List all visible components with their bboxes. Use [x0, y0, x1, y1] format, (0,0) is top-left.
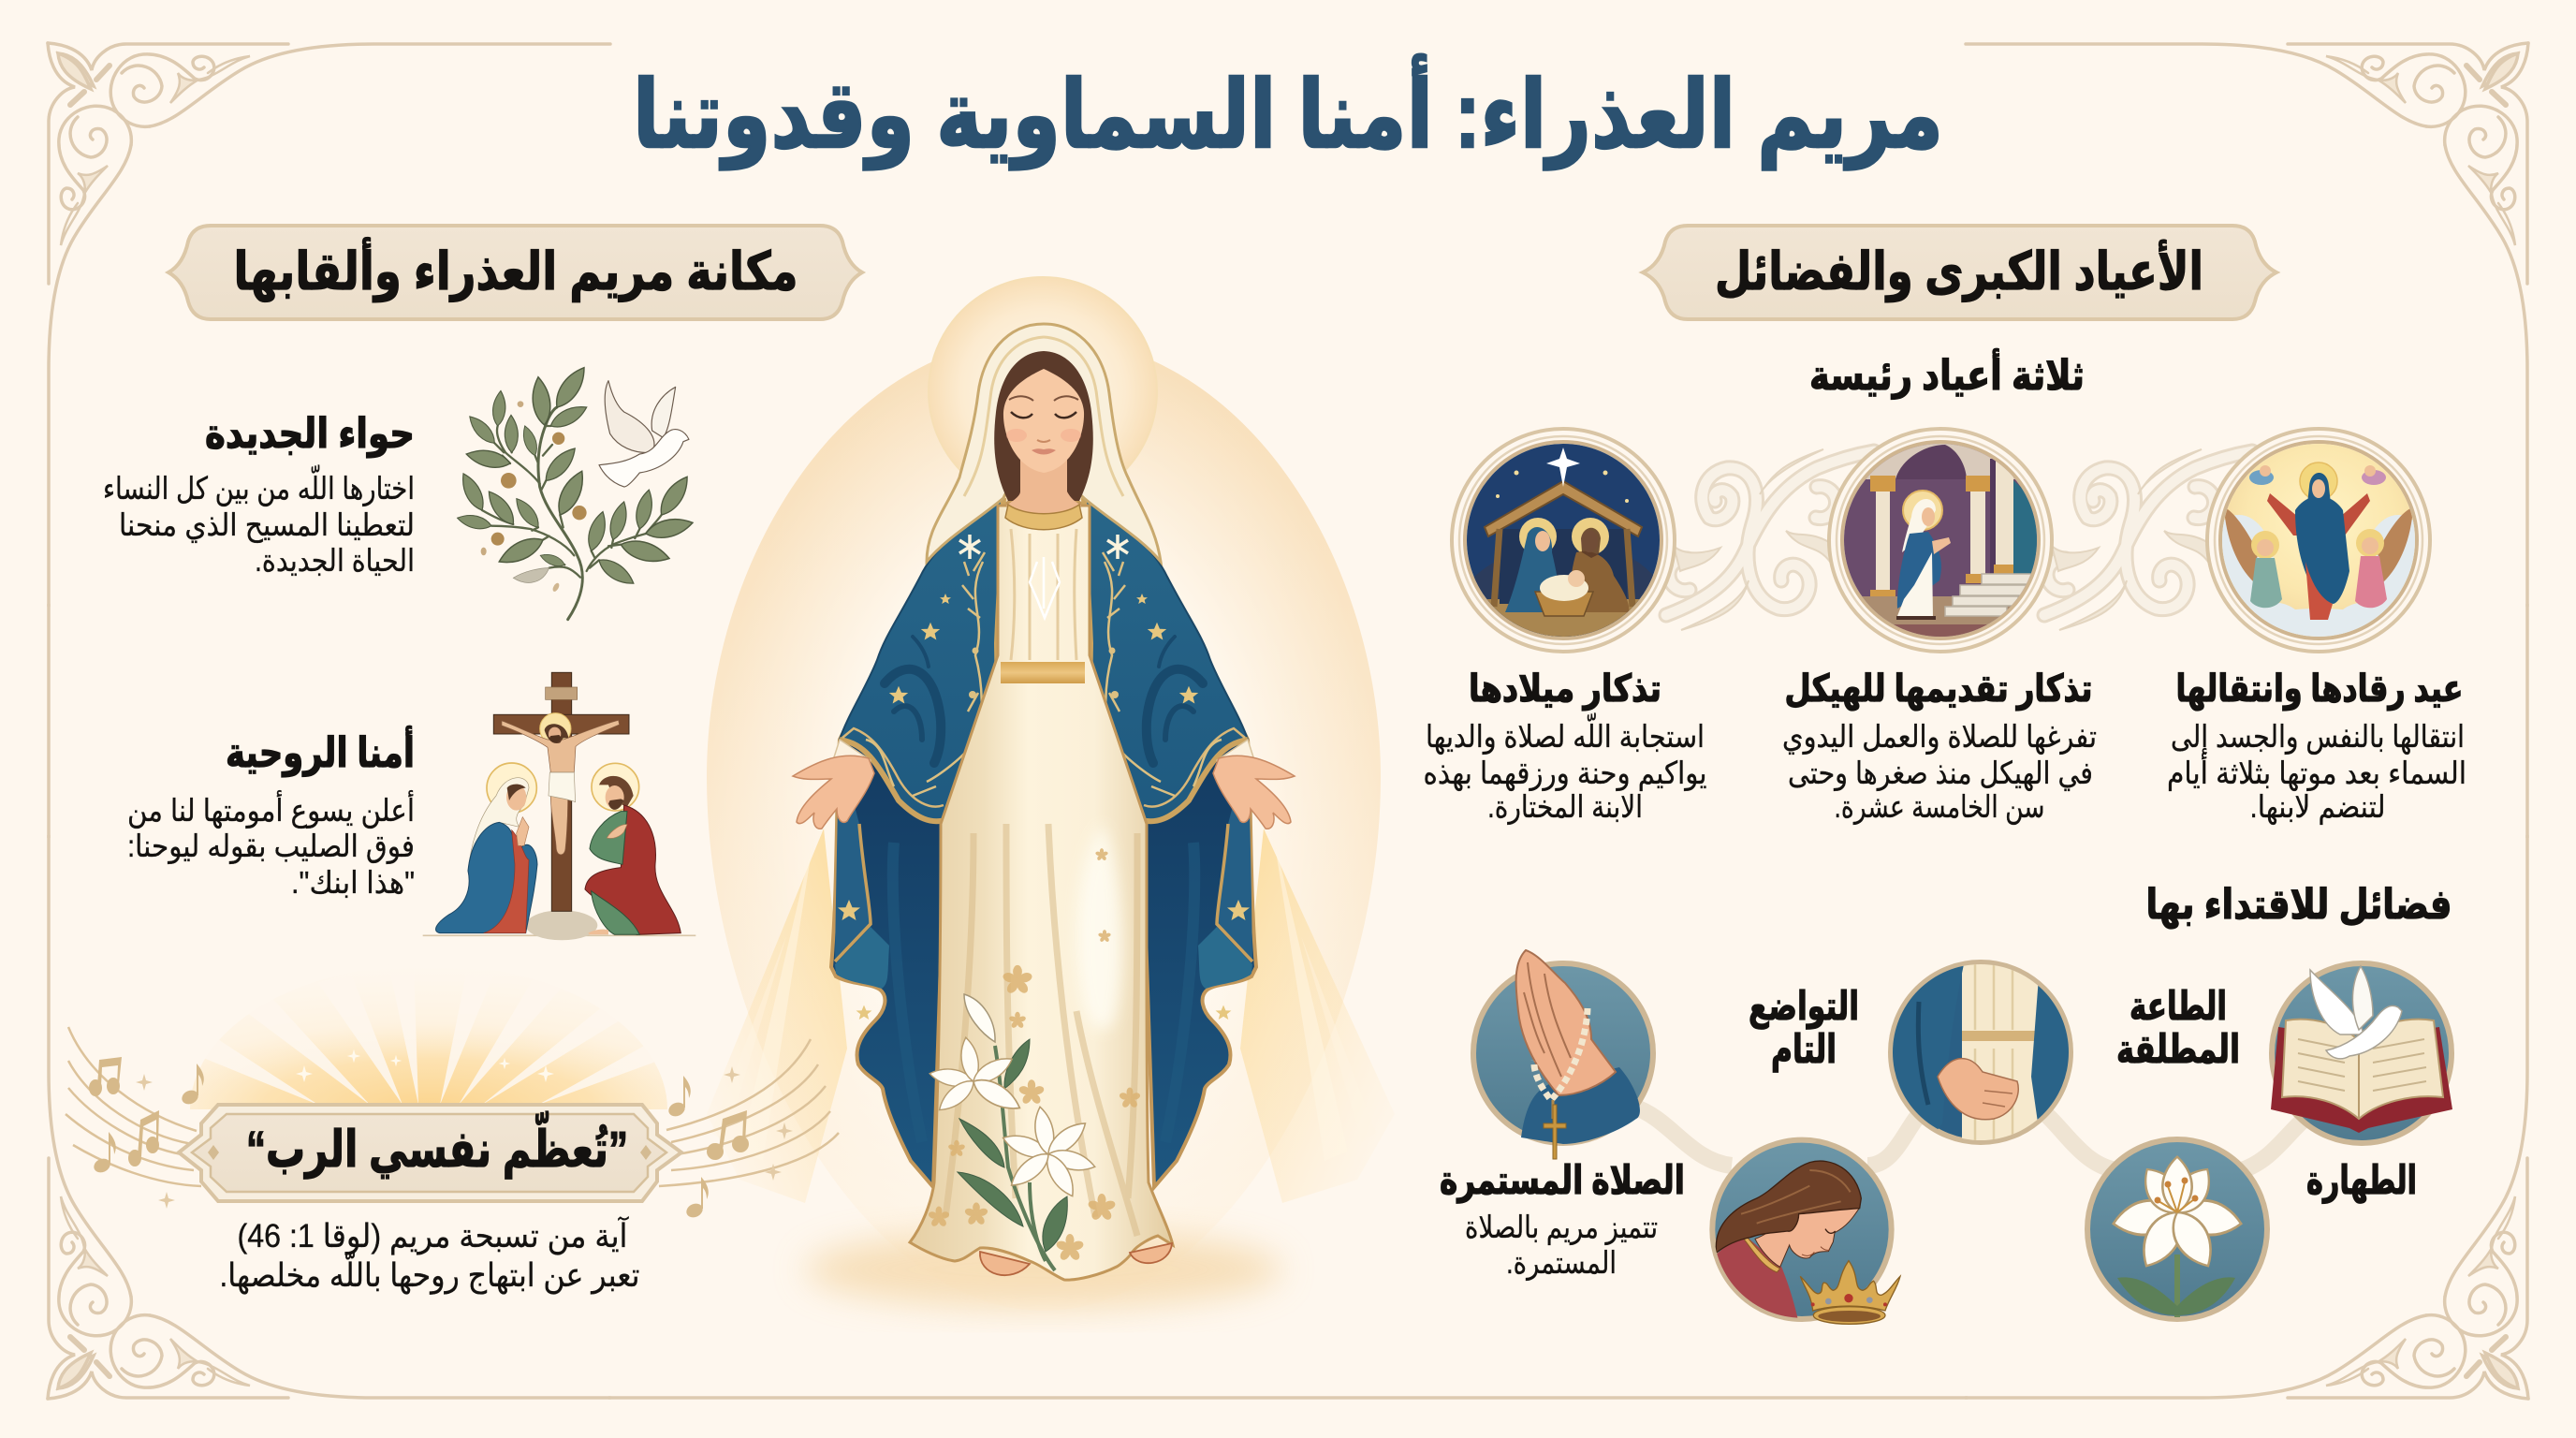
gold belt — [1001, 662, 1085, 683]
icon: olive branch and dove — [456, 363, 695, 620]
virtue label: obedience: الطاعة — [2130, 984, 2227, 1028]
hair — [994, 351, 1093, 501]
musical staff and notes — [66, 1027, 839, 1220]
verse caption — [219, 1215, 640, 1295]
hands — [793, 756, 1295, 829]
virtue label: continuous prayer: المستمرة. — [1506, 1245, 1617, 1281]
angels — [2224, 465, 2413, 608]
virtue label: continuous prayer — [1440, 1158, 1685, 1281]
feast: dormition and assumption: لتنضم لابنها. — [2250, 789, 2385, 825]
virtue: obedience medallion with book and dove — [2271, 963, 2452, 1143]
feast: nativity of Mary: الابنة المختارة. — [1487, 789, 1643, 825]
mantle — [831, 498, 1256, 1187]
feet — [980, 1243, 1172, 1275]
feast: presentation to the temple: سن الخامسة عشرة. — [1835, 789, 2044, 825]
ground shadow — [805, 1230, 1282, 1309]
text block: New Eve: اختارها اللّه من بين كل النساء — [103, 465, 415, 506]
virtue label: humility — [1749, 984, 1859, 1073]
quote banner — [179, 1105, 681, 1201]
text block: New Eve: الحياة الجديدة. — [255, 543, 415, 578]
verse caption: تعبر عن ابتهاج روحها باللّه مخلصها. — [219, 1250, 640, 1295]
quote banner: ”تُعظّم نفسي الرب“ — [246, 1111, 628, 1179]
face — [1003, 369, 1084, 473]
text block: New Eve — [103, 411, 415, 578]
section banner: major feasts and virtues — [1643, 226, 2276, 319]
virtue label: obedience: المطلقة — [2116, 1027, 2240, 1071]
text block: Our spiritual mother: فوق الصليب بقوله ليوحنا: — [127, 829, 415, 864]
virtue: purity medallion with lily — [2087, 1139, 2267, 1320]
veil — [927, 324, 1161, 562]
medallion: nativity — [1452, 429, 1675, 652]
lily stalk — [929, 994, 1097, 1270]
section banner: Mary's status and titles — [168, 226, 862, 319]
gold collar — [1005, 505, 1082, 530]
Mary at the cross — [436, 763, 537, 933]
scroll connectors between feast medallions — [1666, 449, 2252, 630]
text block: Our spiritual mother: أمنا الروحية — [226, 726, 415, 777]
section banner: major feasts and virtues: الأعياد الكبرى والفضائل — [1715, 239, 2203, 302]
subheading: three main feasts: ثلاثة أعياد رئيسة — [1809, 348, 2085, 400]
virtue: humble woman medallion with crown — [1712, 1140, 1900, 1324]
light rays from hands — [707, 829, 1395, 1203]
feast: dormition and assumption: عيد رقادها وانتقالها — [2175, 668, 2464, 711]
feast: dormition and assumption: انتقالها بالنفس والجسد إلى — [2171, 719, 2465, 756]
subheading: virtues to imitate: فضائل للاقتداء بها — [2145, 882, 2452, 929]
feast: dormition and assumption — [2167, 668, 2466, 825]
virtue label: continuous prayer: تتميز مريم بالصلاة — [1465, 1210, 1658, 1245]
section banner: Mary's status and titles: مكانة مريم العذراء وألقابها — [234, 237, 798, 302]
text block: New Eve: لتعطينا المسيح الذي منحنا — [119, 507, 415, 543]
virtue label: continuous prayer: الصلاة المستمرة — [1440, 1158, 1685, 1204]
text block: Our spiritual mother: "هذا ابنك". — [291, 865, 415, 900]
icon: crucifixion with Mary and John — [423, 672, 695, 940]
connectors between virtue medallions — [1633, 1107, 2305, 1170]
feast: nativity of Mary: استجابة اللّه لصلاة والديها — [1426, 713, 1705, 755]
text block: Our spiritual mother: أعلن يسوع أمومتها لنا من — [127, 790, 415, 829]
virtue label: purity: الطهارة — [2306, 1158, 2417, 1204]
text block: New Eve: حواء الجديدة — [205, 411, 415, 458]
feast: presentation to the temple: في الهيكل منذ صغرها وحتى — [1788, 756, 2093, 791]
central figure: Virgin Mary — [707, 277, 1395, 1311]
feast: dormition and assumption: السماء بعد موتها بثلاثة أيام — [2167, 753, 2466, 791]
medallion: assumption — [2203, 429, 2434, 665]
feast: presentation to the temple: تفرغها للصلاة والعمل اليدوي — [1782, 719, 2097, 755]
neck — [1006, 459, 1081, 517]
glow oval — [707, 337, 1381, 1311]
verse caption: آية من تسبحة مريم (لوقا 1: 46) — [238, 1215, 630, 1255]
virtue label: humility: التام — [1771, 1027, 1837, 1073]
virtue label: humility: التواضع — [1749, 984, 1859, 1030]
feast: nativity of Mary: تذكار ميلادها — [1469, 668, 1661, 711]
feast: presentation to the temple: تذكار تقديمها للهيكل — [1784, 668, 2093, 711]
gown — [910, 506, 1173, 1280]
virtue label: obedience — [2116, 984, 2240, 1071]
virtue: prayer medallion with hands and rosary — [1473, 950, 1653, 1159]
feast: presentation to the temple — [1782, 668, 2097, 825]
title: مريم العذراء: أمنا السماوية وقدوتنا — [633, 53, 1943, 170]
feast: nativity of Mary — [1423, 668, 1707, 825]
sunburst behind quote — [190, 964, 679, 1109]
virtue: humility medallion with hands — [1891, 955, 2078, 1152]
text block: Our spiritual mother — [127, 726, 415, 900]
feast: nativity of Mary: يواكيم وحنة ورزقهما بهذه — [1423, 756, 1707, 791]
dove — [599, 381, 689, 487]
halo — [929, 277, 1157, 506]
John at the cross — [585, 763, 681, 934]
crown — [1800, 1261, 1900, 1324]
medallion: presentation in the temple — [1829, 429, 2052, 652]
